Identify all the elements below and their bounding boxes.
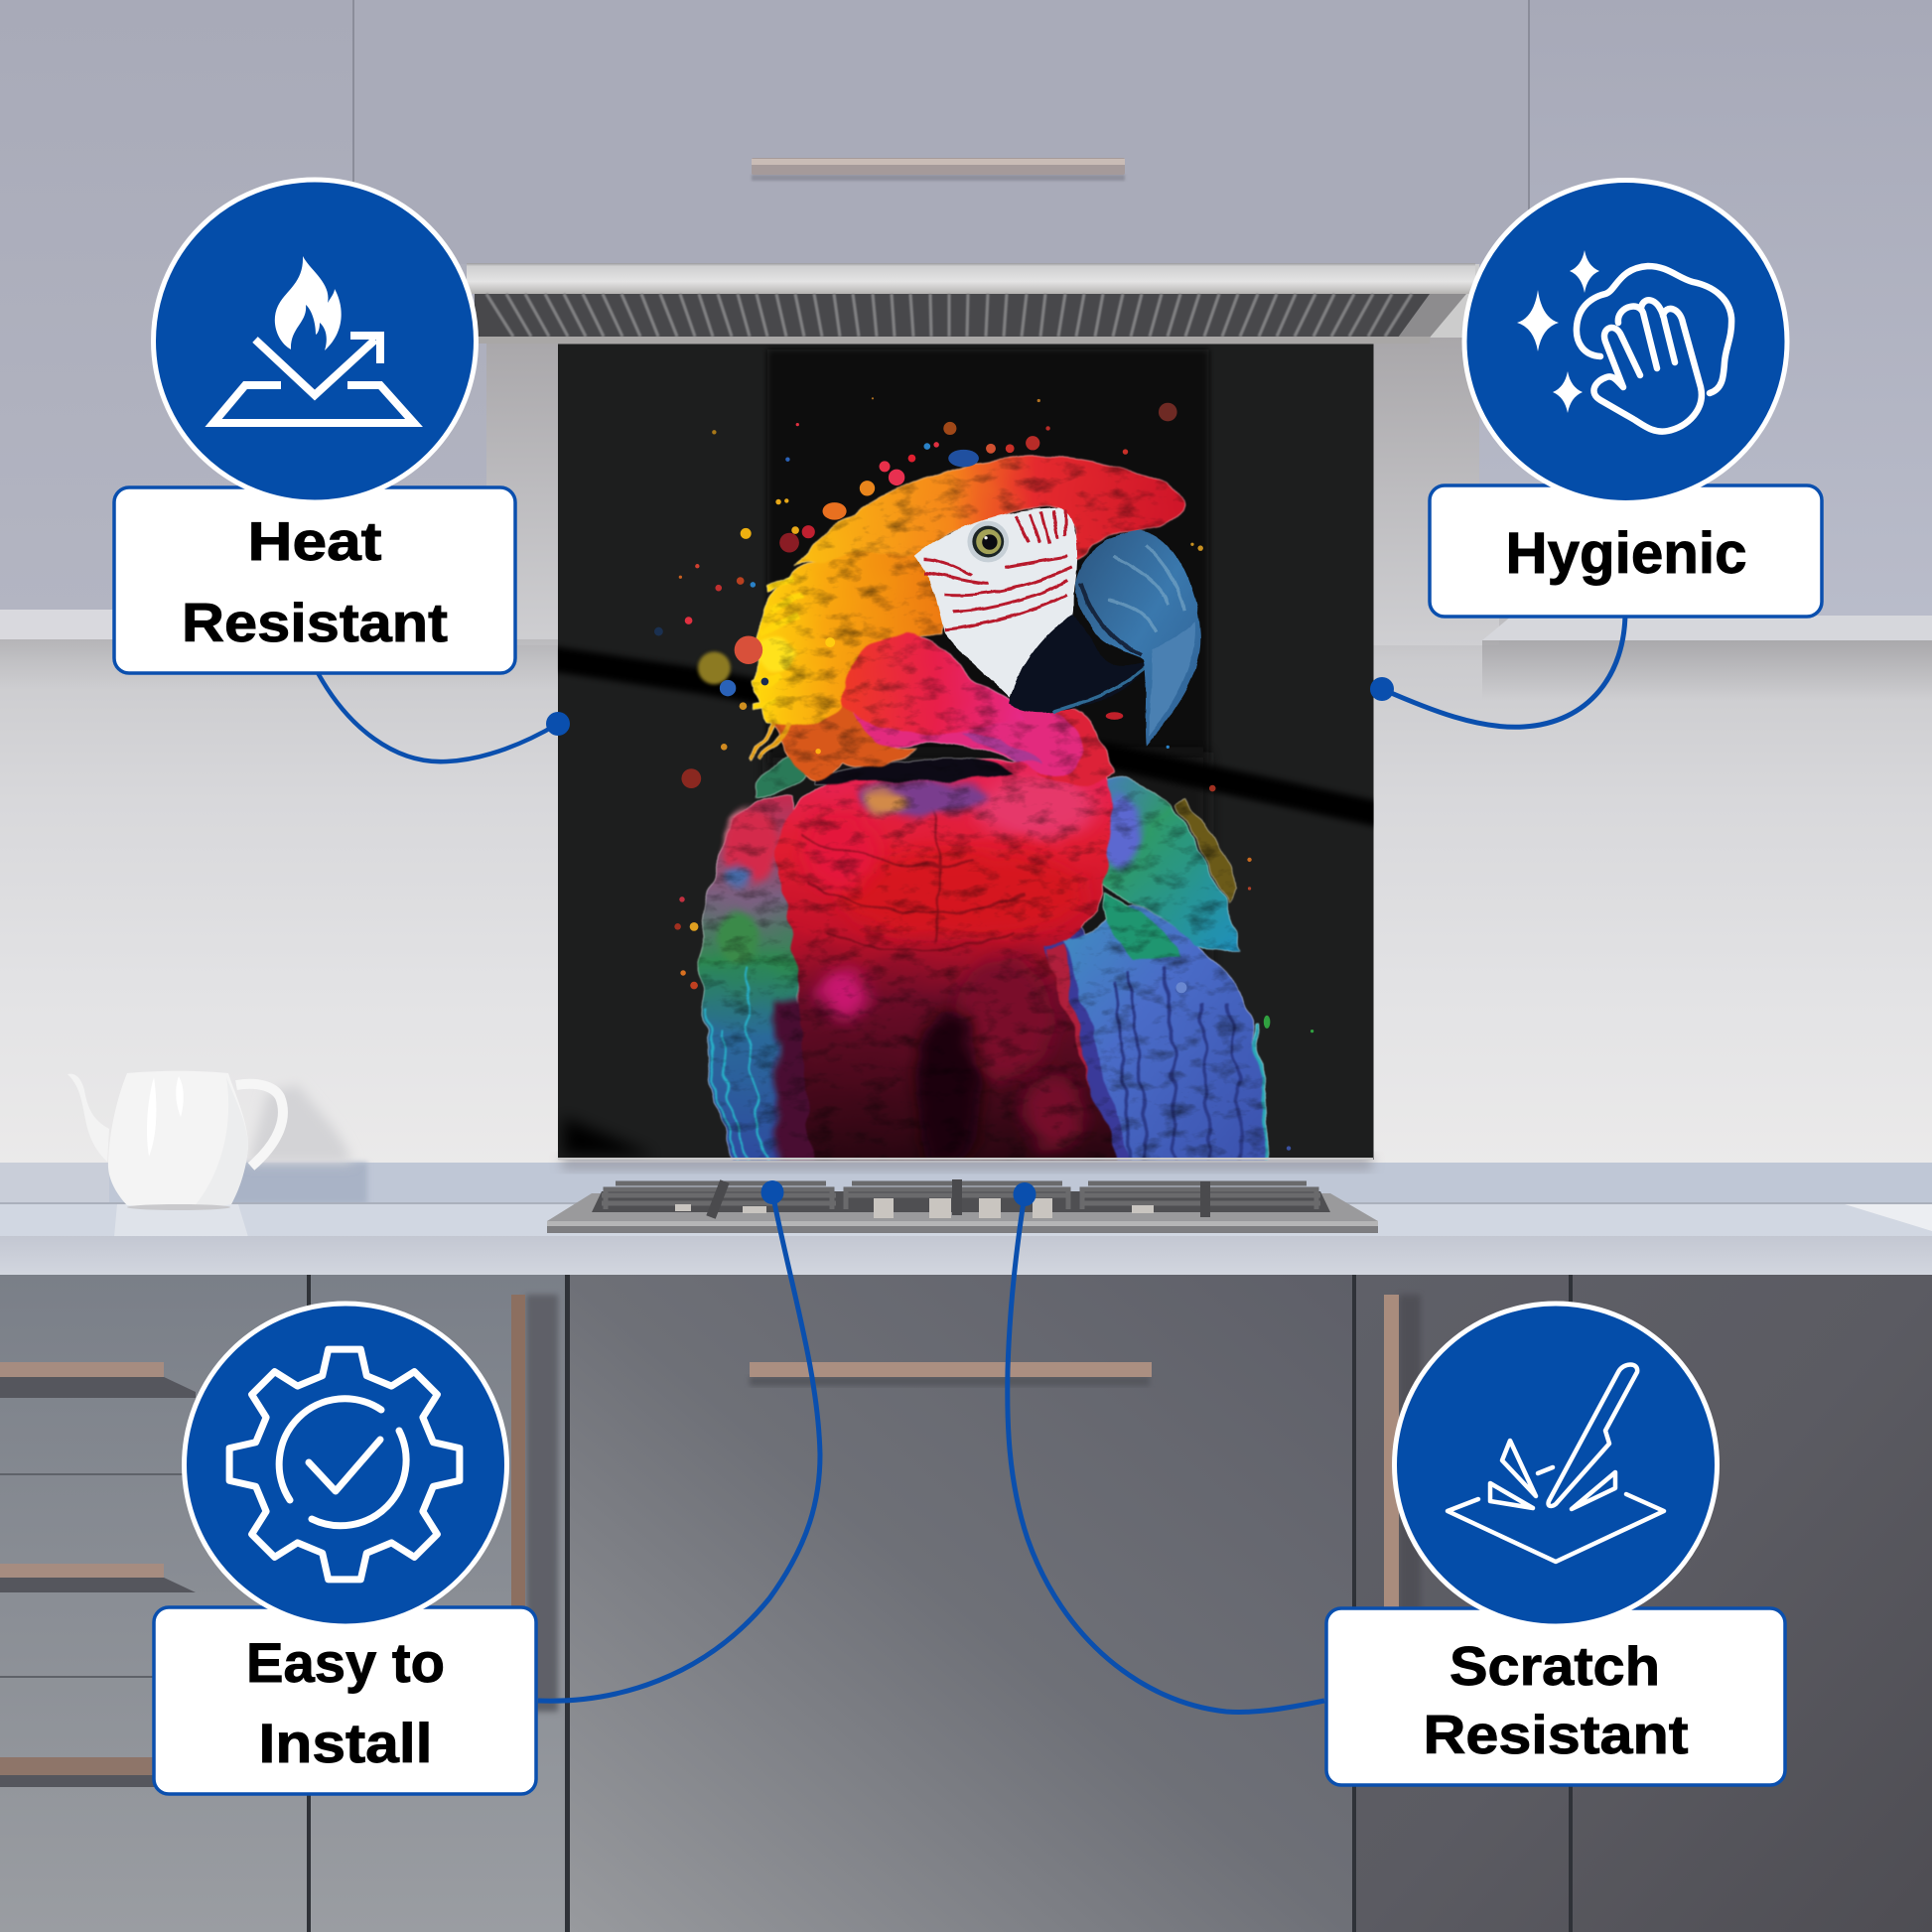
vertical handle right bbox=[1384, 1295, 1399, 1607]
icon: gear with check mark bbox=[229, 1349, 460, 1580]
parrot crown bbox=[792, 456, 1185, 567]
feature: hygienic bbox=[1430, 181, 1822, 617]
feature: scratch resistant bbox=[1326, 1304, 1785, 1785]
upper left cabinet bbox=[0, 0, 486, 612]
label box: hygienic bbox=[1430, 485, 1822, 617]
badge: hygienic bbox=[1464, 181, 1787, 502]
upper right cabinet bbox=[1479, 0, 1932, 616]
drawer handles bbox=[0, 1362, 196, 1787]
badge: easy to install bbox=[185, 1304, 506, 1626]
chest collar bbox=[858, 781, 988, 816]
badge: scratch resistant bbox=[1394, 1304, 1718, 1626]
paint splatter bbox=[654, 397, 1313, 1151]
label box: heat resistant bbox=[114, 487, 515, 673]
label text: heat resistant: Resistant bbox=[182, 592, 448, 653]
label text: easy to install: Easy to bbox=[246, 1631, 445, 1694]
glass splashback panel with parrot bbox=[552, 344, 1380, 1172]
icon: flame over surface bbox=[213, 256, 414, 423]
parrot body and plumage bbox=[702, 456, 1268, 1172]
hob bbox=[547, 1179, 1378, 1233]
parrot lower cheek bbox=[841, 632, 1029, 735]
upper centre cabinet bbox=[353, 0, 1529, 264]
parrot chest bbox=[775, 759, 1119, 1172]
vertical handle left bbox=[511, 1295, 525, 1607]
connector: heat resistant bbox=[315, 667, 570, 761]
splash wall behind panel bbox=[467, 338, 1499, 645]
teapot bbox=[68, 1071, 352, 1210]
label text: heat resistant: Heat bbox=[248, 510, 381, 572]
icon: hand wiping with sparkles bbox=[1517, 250, 1731, 432]
label text: scratch resistant: Scratch bbox=[1449, 1635, 1660, 1697]
badge: heat resistant bbox=[153, 180, 477, 502]
parrot right wing bbox=[1042, 774, 1271, 1160]
parrot orange face bbox=[752, 545, 942, 758]
feature: easy to install bbox=[154, 1304, 536, 1794]
label text: scratch resistant: Resistant bbox=[1424, 1704, 1688, 1765]
centre drawer handle bbox=[750, 1362, 1152, 1386]
parrot left wing bbox=[702, 757, 841, 1167]
label text: easy to install: Install bbox=[258, 1712, 433, 1774]
parrot beak bbox=[1009, 530, 1200, 746]
panel base bbox=[558, 344, 1374, 1160]
right shelf bbox=[1482, 616, 1932, 640]
panel shadow bbox=[562, 1156, 1372, 1170]
connector: hygienic bbox=[1370, 612, 1625, 727]
label box: easy to install bbox=[154, 1607, 536, 1794]
parrot neck bbox=[770, 698, 1113, 784]
parrot white face with stripes bbox=[914, 507, 1077, 698]
connector: easy to install bbox=[538, 1180, 820, 1701]
icon: knife scratching surface bbox=[1448, 1364, 1664, 1562]
upper cabinet handle bbox=[752, 158, 1125, 181]
wall bbox=[0, 606, 1932, 1167]
label text: hygienic: Hygienic bbox=[1505, 521, 1747, 586]
lower cabinets bbox=[0, 1275, 1932, 1932]
feature: heat resistant bbox=[114, 180, 515, 673]
panel edge highlight bbox=[558, 1158, 1373, 1160]
range hood bbox=[467, 263, 1475, 344]
connector: scratch resistant bbox=[1008, 1182, 1324, 1713]
label box: scratch resistant bbox=[1326, 1608, 1785, 1785]
countertop bbox=[0, 1163, 1932, 1275]
parrot eye bbox=[967, 521, 1009, 562]
